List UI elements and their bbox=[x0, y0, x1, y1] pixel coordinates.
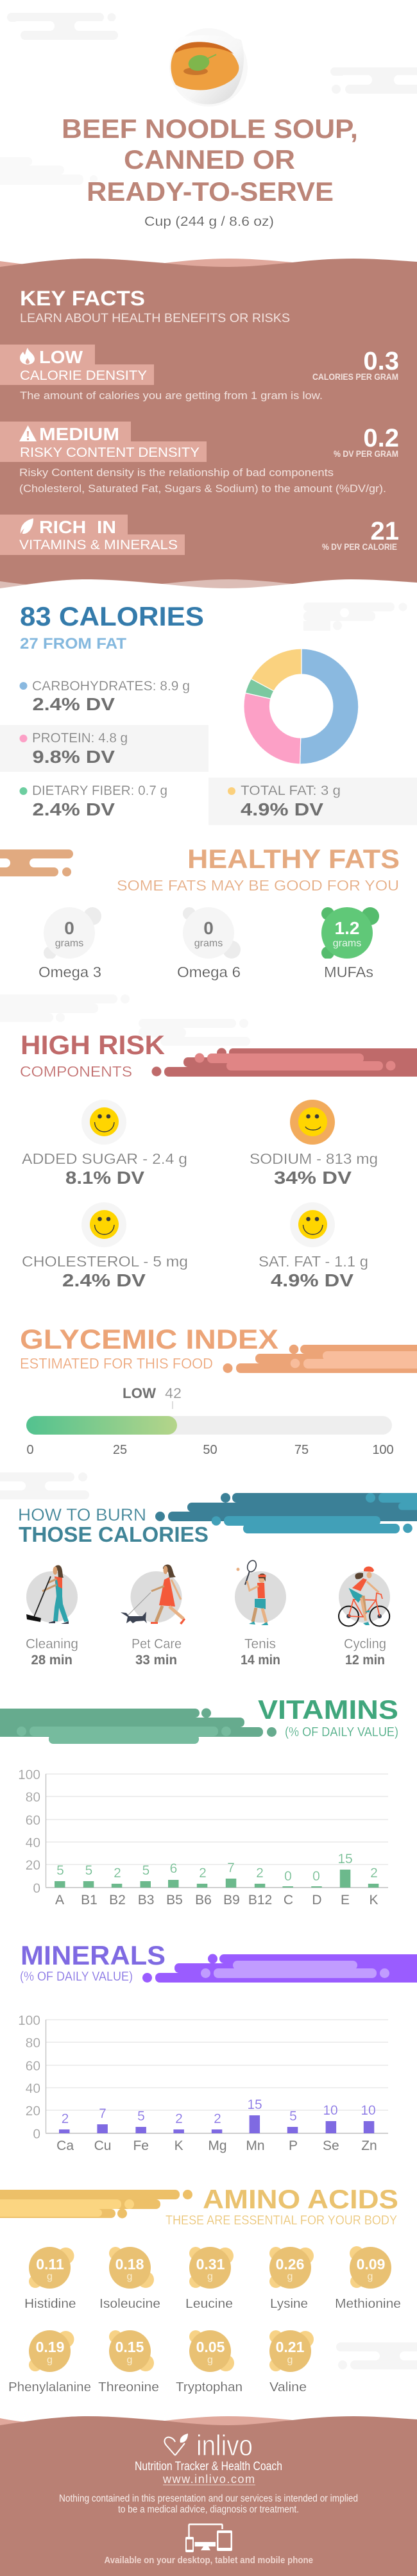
stat: threonine: Threonine bbox=[98, 2380, 159, 2394]
bar chart: minerals: Mn bbox=[246, 2138, 265, 2153]
burn heading line 2: THOSE CALORIES bbox=[19, 1523, 208, 1546]
decorative cloud: red bbox=[151, 1048, 417, 1077]
bar chart: vitamins: B12 bbox=[248, 1893, 272, 1907]
bar chart: minerals: 5 bbox=[137, 2109, 145, 2124]
stat: phenylalanine: g bbox=[47, 2355, 53, 2366]
bar chart: minerals: 20 bbox=[26, 2104, 40, 2119]
stat: methionine: g bbox=[368, 2271, 373, 2282]
calories from fat: 27 FROM FAT bbox=[20, 635, 126, 653]
stat: carbohydrates bbox=[19, 679, 190, 714]
stat: total fat: TOTAL FAT: 3 g bbox=[241, 783, 341, 798]
burn heading line 1: HOW TO BURN bbox=[18, 1505, 146, 1524]
background cloud: right of amino acids bbox=[336, 2342, 417, 2369]
stat: MUFAs: 1.2 bbox=[335, 918, 359, 938]
stat: protein: PROTEIN: 4.8 g bbox=[32, 731, 128, 746]
stat: sodium: 34% DV bbox=[274, 1168, 352, 1188]
stat: dietary fiber: DIETARY FIBER: 0.7 g bbox=[32, 783, 167, 798]
bar chart: vitamins: 2 bbox=[199, 1866, 207, 1881]
bar chart: minerals: 15 bbox=[247, 2097, 262, 2112]
minerals subheading: (% OF DAILY VALUE) bbox=[20, 1970, 133, 1984]
stat: MUFAs bbox=[321, 907, 379, 980]
fact: low calorie density: CALORIE DENSITY bbox=[20, 368, 147, 383]
activity: cycling bbox=[339, 1567, 390, 1668]
stat: threonine bbox=[98, 2330, 159, 2394]
glycemic scale bar: 100 bbox=[372, 1443, 394, 1457]
bar chart: vitamins: 2 bbox=[370, 1866, 378, 1881]
fact: rich in vitamins and minerals: RICH IN bbox=[39, 517, 116, 537]
availability note: Available on your desktop, tablet and mobile phone bbox=[104, 2555, 313, 2566]
stat: sodium: SODIUM - 813 mg bbox=[250, 1150, 378, 1167]
icon: flame bbox=[20, 348, 35, 364]
section: how to burn those calories bbox=[18, 1493, 417, 1668]
calories heading: 83 CALORIES bbox=[20, 601, 204, 631]
stat: isoleucine: 0.18 bbox=[115, 2256, 144, 2273]
vitamins subheading: (% OF DAILY VALUE) bbox=[285, 1725, 398, 1739]
fact: low calorie density bbox=[0, 345, 399, 402]
icon: woman walking dog bbox=[121, 1564, 185, 1625]
stat: threonine: 0.15 bbox=[115, 2339, 144, 2355]
stat: cholesterol: 2.4% DV bbox=[62, 1270, 146, 1290]
bar chart: vitamins: 15 bbox=[337, 1852, 353, 1866]
stat: saturated fat: 4.9% DV bbox=[271, 1270, 353, 1290]
stat: tryptophan: 0.05 bbox=[196, 2339, 225, 2355]
stat: cholesterol bbox=[22, 1202, 188, 1290]
bar chart: vitamins: B5 bbox=[166, 1893, 183, 1907]
stat: histidine: Histidine bbox=[24, 2296, 76, 2311]
decorative cloud: orange bbox=[223, 1345, 417, 1373]
glycemic scale bar: 25 bbox=[113, 1443, 127, 1457]
bar chart: minerals: Se bbox=[323, 2138, 339, 2153]
bar chart: minerals: 2 bbox=[175, 2111, 183, 2126]
bar chart: vitamins: A bbox=[55, 1893, 64, 1907]
background cloud: above burn bbox=[0, 1472, 96, 1499]
activity: cleaning: 28 min bbox=[31, 1653, 72, 1668]
stat: omega 6 bbox=[177, 907, 241, 980]
bar chart: minerals bbox=[18, 2013, 388, 2153]
logo: inlivo bbox=[165, 2429, 253, 2462]
bar chart: vitamins: 0 bbox=[33, 1881, 40, 1896]
fact: medium risky content density: (Cholesterol, Saturated Fat, Sugars & Sodium) to the amount (%DV/gr). bbox=[19, 482, 386, 495]
background cloud: calories bbox=[303, 602, 407, 631]
bar chart: minerals: 2 bbox=[214, 2111, 221, 2126]
bar chart: vitamins: B6 bbox=[195, 1893, 212, 1907]
bar chart: vitamins: B9 bbox=[223, 1893, 240, 1907]
tagline: Nutrition Tracker & Health Coach bbox=[135, 2460, 282, 2473]
stat: histidine: 0.11 bbox=[36, 2256, 64, 2273]
activity: pet care: 33 min bbox=[135, 1653, 177, 1668]
disclaimer: to be a medical advice, diagnosis or treatment. bbox=[118, 2504, 299, 2515]
bar chart: minerals: Mg bbox=[208, 2138, 227, 2153]
background clouds: above high risk bbox=[0, 994, 250, 1046]
stat: saturated fat bbox=[259, 1202, 368, 1290]
stat: histidine bbox=[24, 2247, 76, 2311]
panel: calories bbox=[0, 601, 417, 825]
fact: low calorie density: 0.3 bbox=[363, 347, 399, 375]
stat: lysine: g bbox=[287, 2271, 293, 2282]
decorative cloud: orange bbox=[0, 849, 81, 876]
website link: www.inlivo.com bbox=[162, 2473, 255, 2486]
bar chart: minerals: 100 bbox=[18, 2013, 40, 2028]
fact: medium risky content density bbox=[0, 422, 399, 495]
section: amino acids bbox=[0, 2184, 401, 2394]
activity: cleaning: Cleaning bbox=[26, 1637, 78, 1651]
stat: total fat bbox=[208, 778, 417, 825]
decorative cloud: teal bbox=[155, 1493, 417, 1533]
fact: rich in vitamins and minerals: 21 bbox=[371, 517, 399, 545]
stat: added sugar: 8.1% DV bbox=[65, 1168, 144, 1188]
stat: leucine: 0.31 bbox=[196, 2256, 225, 2273]
stat: omega 6: Omega 6 bbox=[177, 964, 241, 980]
icon: woman sweeping bbox=[26, 1565, 69, 1624]
fact: medium risky content density: Risky Content density is the relationship of bad components bbox=[19, 466, 334, 479]
glycemic index subheading: ESTIMATED FOR THIS FOOD bbox=[20, 1355, 213, 1372]
fact: medium risky content density: % DV PER GRAM bbox=[334, 449, 398, 459]
panel: footer bbox=[0, 2416, 417, 2576]
stat: leucine bbox=[185, 2247, 234, 2311]
fact: rich in vitamins and minerals bbox=[0, 515, 399, 555]
glycemic scale bar bbox=[26, 1416, 394, 1457]
bar chart: vitamins: 2 bbox=[114, 1866, 121, 1881]
stat: methionine: Methionine bbox=[335, 2296, 401, 2311]
stat: lysine bbox=[269, 2247, 314, 2311]
bar chart: minerals: 80 bbox=[26, 2036, 40, 2051]
bar chart: vitamins bbox=[18, 1768, 388, 1907]
stat: phenylalanine: Phenylalanine bbox=[8, 2380, 91, 2394]
icon: soup bowl bbox=[169, 28, 248, 107]
bar chart: vitamins: 7 bbox=[227, 1861, 235, 1875]
stat: tryptophan: Tryptophan bbox=[176, 2380, 243, 2394]
glycemic index heading: GLYCEMIC INDEX bbox=[20, 1324, 278, 1355]
bar chart: vitamins: 80 bbox=[26, 1790, 40, 1805]
stat: MUFAs: grams bbox=[333, 938, 361, 949]
stat: lysine: Lysine bbox=[270, 2296, 308, 2311]
activity: tennis bbox=[235, 1559, 286, 1668]
icon: cyclist bbox=[339, 1567, 389, 1626]
title: READY-TO-SERVE bbox=[87, 176, 334, 207]
stat: omega 6: grams bbox=[194, 938, 223, 949]
stat: carbohydrates: CARBOHYDRATES: 8.9 g bbox=[32, 679, 190, 694]
glycemic scale bar: 50 bbox=[203, 1443, 217, 1457]
bar chart: minerals: Zn bbox=[361, 2138, 377, 2153]
stat: lysine: 0.26 bbox=[276, 2256, 304, 2273]
stat: isoleucine bbox=[99, 2247, 160, 2311]
stat: dietary fiber bbox=[19, 783, 167, 819]
bar chart: minerals: 60 bbox=[26, 2059, 40, 2074]
bar chart: vitamins: C bbox=[284, 1893, 293, 1907]
section: healthy fats bbox=[0, 844, 400, 980]
logo: inlivo: inlivo bbox=[196, 2429, 253, 2462]
stat: omega 3: grams bbox=[55, 938, 83, 949]
bar chart: vitamins: 6 bbox=[170, 1861, 177, 1876]
stat: MUFAs: MUFAs bbox=[324, 964, 373, 980]
serving size: Cup (244 g / 8.6 oz) bbox=[144, 214, 274, 229]
bar chart: minerals: 0 bbox=[33, 2127, 40, 2142]
background cloud: left of title bbox=[0, 157, 98, 185]
stat: saturated fat: SAT. FAT - 1.1 g bbox=[259, 1253, 368, 1270]
stat: protein bbox=[0, 725, 208, 772]
bar chart: vitamins: B1 bbox=[81, 1893, 98, 1907]
fact: low calorie density: LOW bbox=[39, 347, 83, 367]
amino acids heading: AMINO ACIDS bbox=[203, 2184, 398, 2214]
stat: carbohydrates: 2.4% DV bbox=[32, 694, 115, 714]
stat: omega 3: Omega 3 bbox=[38, 964, 101, 980]
activity: pet care: Pet Care bbox=[132, 1637, 182, 1651]
bar chart: minerals: 40 bbox=[26, 2081, 40, 2096]
stat: protein: 9.8% DV bbox=[32, 747, 115, 767]
fact: medium risky content density: RISKY CONTENT DENSITY bbox=[20, 445, 200, 460]
icon: tennis player bbox=[236, 1559, 268, 1625]
section: minerals bbox=[18, 1940, 417, 2153]
stat: dietary fiber: 2.4% DV bbox=[32, 799, 115, 819]
activity: tennis: 14 min bbox=[241, 1653, 280, 1668]
bar chart: vitamins: 60 bbox=[26, 1813, 40, 1828]
key facts heading: KEY FACTS bbox=[20, 287, 145, 310]
glycemic value label bbox=[123, 1385, 182, 1409]
disclaimer: Nothing contained in this presentation and our services is intended or implied bbox=[59, 2493, 358, 2504]
fact: rich in vitamins and minerals: VITAMINS & MINERALS bbox=[19, 538, 178, 552]
high risk heading: HIGH RISK bbox=[21, 1030, 165, 1060]
bar chart: vitamins: 5 bbox=[142, 1863, 149, 1878]
section: high risk components bbox=[20, 1030, 417, 1290]
fact: medium risky content density: 0.2 bbox=[363, 424, 399, 452]
healthy fats heading: HEALTHY FATS bbox=[187, 844, 400, 874]
background cloud: top left bbox=[7, 13, 126, 40]
glycemic scale bar: 75 bbox=[294, 1443, 309, 1457]
bar chart: minerals: Fe bbox=[133, 2138, 149, 2153]
bar chart: vitamins: E bbox=[341, 1893, 350, 1907]
decorative cloud: yellow bbox=[0, 2190, 192, 2219]
glycemic scale bar: 0 bbox=[26, 1443, 34, 1457]
stat: valine: g bbox=[287, 2355, 293, 2366]
stat: methionine bbox=[335, 2246, 401, 2311]
glycemic value label: LOW bbox=[123, 1385, 156, 1401]
fact: rich in vitamins and minerals: % DV PER CALORIE bbox=[322, 542, 397, 552]
section: glycemic index bbox=[20, 1324, 417, 1457]
glycemic value label: 42 bbox=[165, 1385, 182, 1401]
bar chart: vitamins: D bbox=[312, 1893, 322, 1907]
panel: key facts bbox=[0, 259, 417, 588]
bar chart: vitamins: 40 bbox=[26, 1836, 40, 1850]
section: vitamins bbox=[0, 1694, 398, 1907]
title: CANNED OR bbox=[124, 144, 295, 175]
bar chart: vitamins: 5 bbox=[56, 1863, 64, 1878]
high risk subheading: COMPONENTS bbox=[20, 1063, 132, 1080]
stat: omega 6: 0 bbox=[203, 918, 214, 938]
amino acids subheading: THESE ARE ESSENTIAL FOR YOUR BODY bbox=[166, 2213, 397, 2228]
activity: cleaning bbox=[26, 1565, 78, 1668]
stat: isoleucine: Isoleucine bbox=[99, 2296, 160, 2311]
stat: valine bbox=[269, 2330, 314, 2394]
activity: cycling: Cycling bbox=[344, 1637, 386, 1651]
stat: threonine: g bbox=[127, 2355, 132, 2366]
title: BEEF NOODLE SOUP, bbox=[62, 114, 358, 144]
icon: leaf bbox=[21, 518, 33, 534]
stat: isoleucine: g bbox=[127, 2271, 132, 2282]
bar chart: minerals: Cu bbox=[94, 2138, 111, 2153]
stat: omega 3: 0 bbox=[64, 918, 74, 938]
fact: low calorie density: The amount of calories you are getting from 1 gram is low. bbox=[20, 389, 323, 402]
stat: sodium bbox=[250, 1100, 378, 1188]
stat: phenylalanine bbox=[8, 2330, 91, 2394]
icon: warning triangle bbox=[19, 425, 37, 441]
stat: omega 3 bbox=[38, 907, 101, 980]
healthy fats subheading: SOME FATS MAY BE GOOD FOR YOU bbox=[117, 877, 399, 894]
stat: total fat: 4.9% DV bbox=[241, 799, 323, 819]
bar chart: minerals: Ca bbox=[56, 2138, 74, 2153]
fact: low calorie density: CALORIES PER GRAM bbox=[312, 372, 398, 382]
bar chart: minerals: 2 bbox=[62, 2111, 69, 2126]
disclaimer bbox=[59, 2493, 358, 2515]
stat: histidine: g bbox=[47, 2271, 53, 2282]
bar chart: minerals: 7 bbox=[99, 2106, 106, 2121]
bar chart: minerals: 10 bbox=[361, 2103, 376, 2118]
vitamins heading: VITAMINS bbox=[258, 1694, 398, 1725]
bar chart: vitamins: 5 bbox=[85, 1863, 92, 1878]
bar chart: vitamins: 2 bbox=[256, 1866, 264, 1881]
stat: valine: 0.21 bbox=[276, 2339, 305, 2355]
bar chart: vitamins: 20 bbox=[26, 1858, 40, 1873]
donut chart: macronutrients bbox=[244, 649, 359, 764]
stat: added sugar bbox=[22, 1100, 187, 1188]
minerals heading: MINERALS bbox=[21, 1940, 166, 1970]
stat: leucine: g bbox=[207, 2271, 213, 2282]
decorative cloud: green bbox=[0, 1708, 277, 1744]
bar chart: vitamins: K bbox=[369, 1893, 379, 1907]
bar chart: vitamins: B3 bbox=[138, 1893, 154, 1907]
stat: tryptophan bbox=[176, 2330, 243, 2394]
bar chart: vitamins: 0 bbox=[284, 1869, 292, 1884]
icon: devices bbox=[185, 2524, 232, 2552]
activity: tennis: Tenis bbox=[244, 1637, 276, 1651]
fact: medium risky content density: MEDIUM bbox=[39, 424, 119, 444]
stat: tryptophan: g bbox=[207, 2355, 213, 2366]
bar chart: minerals: 10 bbox=[323, 2103, 338, 2118]
key facts subheading: LEARN ABOUT HEALTH BENEFITS OR RISKS bbox=[20, 312, 290, 325]
decorative cloud: purple bbox=[142, 1954, 417, 1983]
bar chart: minerals: 5 bbox=[289, 2109, 297, 2124]
bar chart: vitamins: 0 bbox=[312, 1869, 320, 1884]
stat: leucine: Leucine bbox=[185, 2296, 233, 2311]
bar chart: vitamins: 100 bbox=[18, 1768, 40, 1782]
background cloud: top right bbox=[330, 67, 417, 94]
bar chart: minerals: P bbox=[289, 2138, 298, 2153]
stat: valine: Valine bbox=[269, 2380, 307, 2394]
activity: cycling: 12 min bbox=[345, 1653, 385, 1668]
stat: methionine: 0.09 bbox=[357, 2256, 385, 2273]
title bbox=[62, 114, 358, 207]
stat: cholesterol: CHOLESTEROL - 5 mg bbox=[22, 1253, 188, 1270]
stat: added sugar: ADDED SUGAR - 2.4 g bbox=[22, 1150, 187, 1167]
bar chart: minerals: K bbox=[174, 2138, 183, 2153]
activity: pet care bbox=[121, 1564, 185, 1668]
bar chart: vitamins: B2 bbox=[109, 1893, 126, 1907]
stat: phenylalanine: 0.19 bbox=[36, 2339, 64, 2355]
